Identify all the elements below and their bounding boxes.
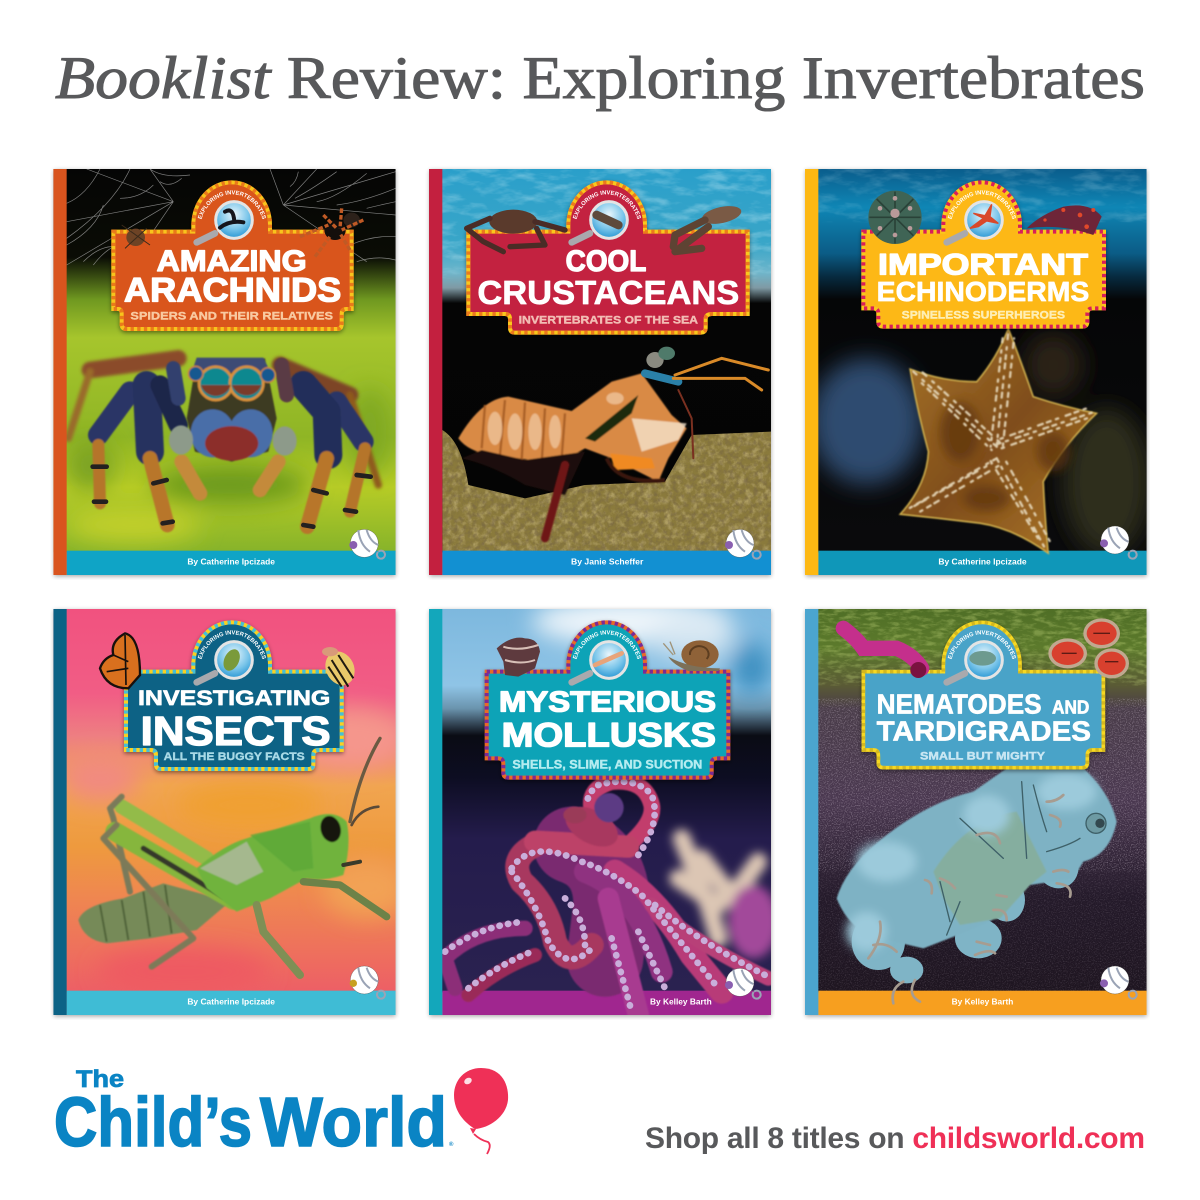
sea star — [900, 328, 1097, 553]
title: Booklist Review: Exploring Invertebrates — [55, 45, 1145, 111]
tardigrade claws — [868, 795, 1071, 1003]
grasshopper hind legs — [103, 797, 233, 967]
logo word: Child's: Child’s — [54, 1083, 252, 1161]
spider legs — [98, 365, 365, 527]
spider leg joints and feet — [93, 467, 371, 527]
far legs — [68, 358, 378, 485]
title banner: EXPLORING INVERTEBRATES — [198, 630, 266, 660]
water highlights — [532, 598, 772, 695]
title banner: COOL — [566, 245, 646, 278]
spine — [805, 609, 818, 1015]
publisher mini icon — [349, 529, 385, 559]
spider body and eyes — [169, 358, 297, 462]
octopus suckers — [445, 782, 768, 1012]
logo word: The: The — [76, 1066, 124, 1093]
spine — [429, 609, 442, 1015]
grasshopper thorax and head — [197, 814, 349, 912]
title banner: IMPORTANT — [878, 248, 1088, 281]
tardigrade body — [837, 764, 1117, 952]
small creatures: crab and lobster — [467, 203, 743, 252]
cover photo background — [53, 609, 396, 992]
magnifying glass with scorpion — [197, 202, 252, 242]
soil texture upper — [805, 698, 1147, 872]
title banner: ARACHNIDS — [124, 272, 341, 310]
publisher mini icon — [725, 529, 761, 559]
title banner: CRUSTACEANS — [477, 275, 739, 312]
title banner — [121, 619, 347, 776]
spine — [805, 169, 818, 575]
spine — [429, 169, 442, 575]
tardigrade mouth — [1086, 813, 1106, 833]
water highlights — [429, 169, 771, 279]
tardigrade legs — [852, 848, 1078, 983]
title banner: SMALL BUT MIGHTY — [920, 750, 1046, 762]
cover photo background — [53, 169, 396, 552]
background colour blobs — [60, 708, 410, 995]
icon: red balloon — [454, 1068, 508, 1154]
magnifying glass with lobster — [572, 202, 627, 242]
shaded leaf tones — [67, 388, 390, 542]
logo word: World: World — [260, 1083, 447, 1161]
bottom band — [67, 551, 396, 575]
title banner: NEMATODES — [877, 688, 1042, 719]
book cover: Amazing Arachnids — [51, 168, 398, 580]
title banner: AMAZING — [157, 245, 307, 278]
cover photo background — [429, 169, 771, 552]
title banner: EXPLORING INVERTEBRATES — [948, 630, 1016, 660]
book cover: Mysterious Mollusks — [426, 608, 774, 1020]
small mollusks: clam and snail — [497, 638, 720, 677]
blurred coral — [678, 838, 778, 958]
byline: By Catherine Ipcizade — [187, 996, 275, 1006]
title banner: INVESTIGATING — [138, 686, 330, 710]
rock shadow texture — [442, 430, 771, 552]
title banner: TARDIGRADES — [877, 716, 1091, 747]
publisher mini icon — [725, 968, 761, 999]
book cover: Cool Crustaceans — [426, 168, 774, 580]
title banner: EXPLORING INVERTEBRATES — [198, 190, 266, 220]
octopus head — [559, 793, 625, 855]
bottom band — [67, 991, 396, 1015]
magnifying glass with tardigrade — [947, 642, 1002, 682]
bottom band — [442, 991, 771, 1015]
bottom band — [818, 551, 1147, 575]
title banner: INVERTEBRATES OF THE SEA — [519, 314, 698, 326]
rock texture — [442, 430, 771, 552]
book cover: Important Echinoderms — [802, 168, 1150, 580]
grasshopper abdomen — [78, 883, 230, 943]
octopus body and arms — [445, 781, 768, 1015]
small creatures: sea urchin and sea cucumber — [868, 191, 1102, 244]
spider web — [67, 169, 396, 265]
book cover: Investigating Insects — [51, 608, 398, 1020]
publisher logo: The Child's World with balloon — [54, 1066, 508, 1161]
title banner — [859, 620, 1108, 774]
title banner — [109, 180, 356, 336]
cover photo background — [805, 609, 1147, 992]
title banner: SPINELESS SUPERHEROES — [902, 309, 1065, 321]
sea rock — [442, 430, 771, 552]
title banner: EXPLORING INVERTEBRATES — [572, 630, 641, 660]
moss texture — [805, 609, 1147, 686]
title banner — [482, 619, 734, 784]
magnifying glass with beetle — [197, 642, 252, 682]
book cover: Nematodes and Tardigrades — [802, 608, 1150, 1020]
soil texture lower — [805, 872, 1147, 992]
mantis shrimp — [458, 373, 687, 538]
title banner: EXPLORING INVERTEBRATES — [572, 190, 641, 220]
byline: By Kelley Barth — [650, 996, 712, 1006]
registered mark: ® — [449, 1141, 454, 1148]
title banner: SHELLS, SLIME, AND SUCTION — [512, 758, 702, 771]
title banner — [859, 180, 1108, 333]
byline: By Catherine Ipcizade — [187, 556, 275, 566]
blurred rocks — [810, 332, 1150, 555]
bottom band — [442, 551, 771, 575]
bottom band — [818, 991, 1147, 1015]
publisher mini icon — [350, 966, 385, 999]
sea star arm spines — [903, 332, 1095, 548]
shop call to action: Shop all 8 titles on childsworld.com — [645, 1122, 1145, 1155]
small creatures: tick and tarantula — [122, 208, 363, 257]
title banner: INSECTS — [141, 708, 331, 754]
small creatures: pink worm and red cells — [843, 618, 1129, 678]
magnifying glass with star — [947, 202, 1002, 242]
publisher mini icon — [1100, 966, 1137, 999]
title banner: MOLLUSKS — [502, 717, 716, 755]
small insects: monarch butterfly and striped beetle — [100, 633, 360, 690]
title banner: ALL THE BUGGY FACTS — [164, 751, 305, 763]
shrimp eyes and antennae — [645, 347, 768, 458]
title banner: MYSTERIOUS — [499, 687, 716, 719]
magnifying glass with squid — [572, 642, 627, 682]
title banner: SPIDERS AND THEIR RELATIVES — [130, 311, 333, 323]
byline: By Janie Scheffer — [571, 556, 644, 566]
tardigrade folds — [940, 782, 1080, 935]
spine — [53, 609, 67, 1015]
cover photo background — [805, 169, 1147, 552]
title banner — [464, 180, 752, 335]
spine — [53, 169, 67, 575]
water highlights — [805, 169, 1147, 222]
title banner: EXPLORING INVERTEBRATES — [948, 190, 1016, 220]
publisher mini icon — [1100, 526, 1137, 559]
grasshopper front legs and antennae — [257, 738, 387, 975]
title banner: ECHINODERMS — [877, 276, 1089, 307]
title banner: AND — [1052, 697, 1089, 717]
byline: By Catherine Ipcizade — [938, 556, 1027, 566]
byline: By Kelley Barth — [952, 996, 1013, 1006]
cover photo background — [429, 609, 771, 992]
